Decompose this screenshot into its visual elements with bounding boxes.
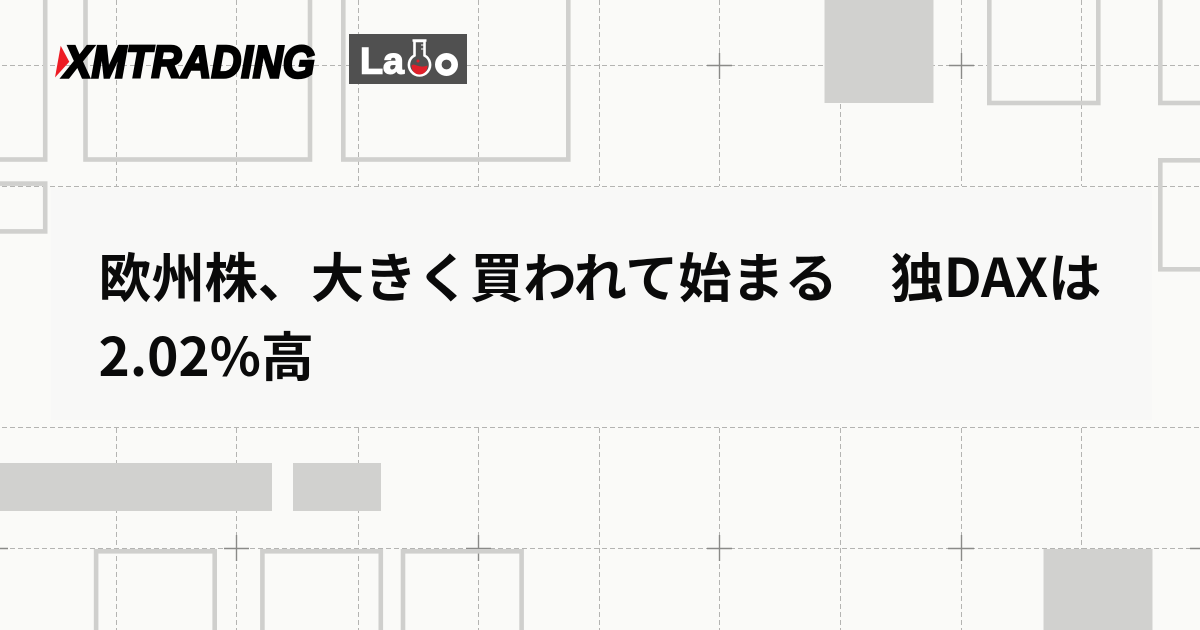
candlestick outlines: bottom row xyxy=(96,551,522,630)
letter o xyxy=(438,56,455,73)
title panel xyxy=(51,188,1152,420)
headline: 2.02%高 xyxy=(98,315,314,392)
filled bar: lower left long xyxy=(0,463,272,511)
icon: flask xyxy=(409,40,430,75)
logo: XMTRADING: XMTRADING xyxy=(61,36,315,88)
filled candlestick: bottom right xyxy=(1044,549,1152,630)
headline xyxy=(98,236,1101,392)
filled candlestick: top right xyxy=(824,0,934,103)
logo: Lab: La xyxy=(360,40,404,82)
candlestick outlines: top row xyxy=(0,0,1200,160)
headline: 欧州株、大きく買われて始まる 独DAXは xyxy=(98,236,1101,313)
logo: Lab xyxy=(349,34,467,84)
filled bar: lower left short xyxy=(293,463,381,511)
candlestick outlines: middle row xyxy=(0,160,1200,269)
